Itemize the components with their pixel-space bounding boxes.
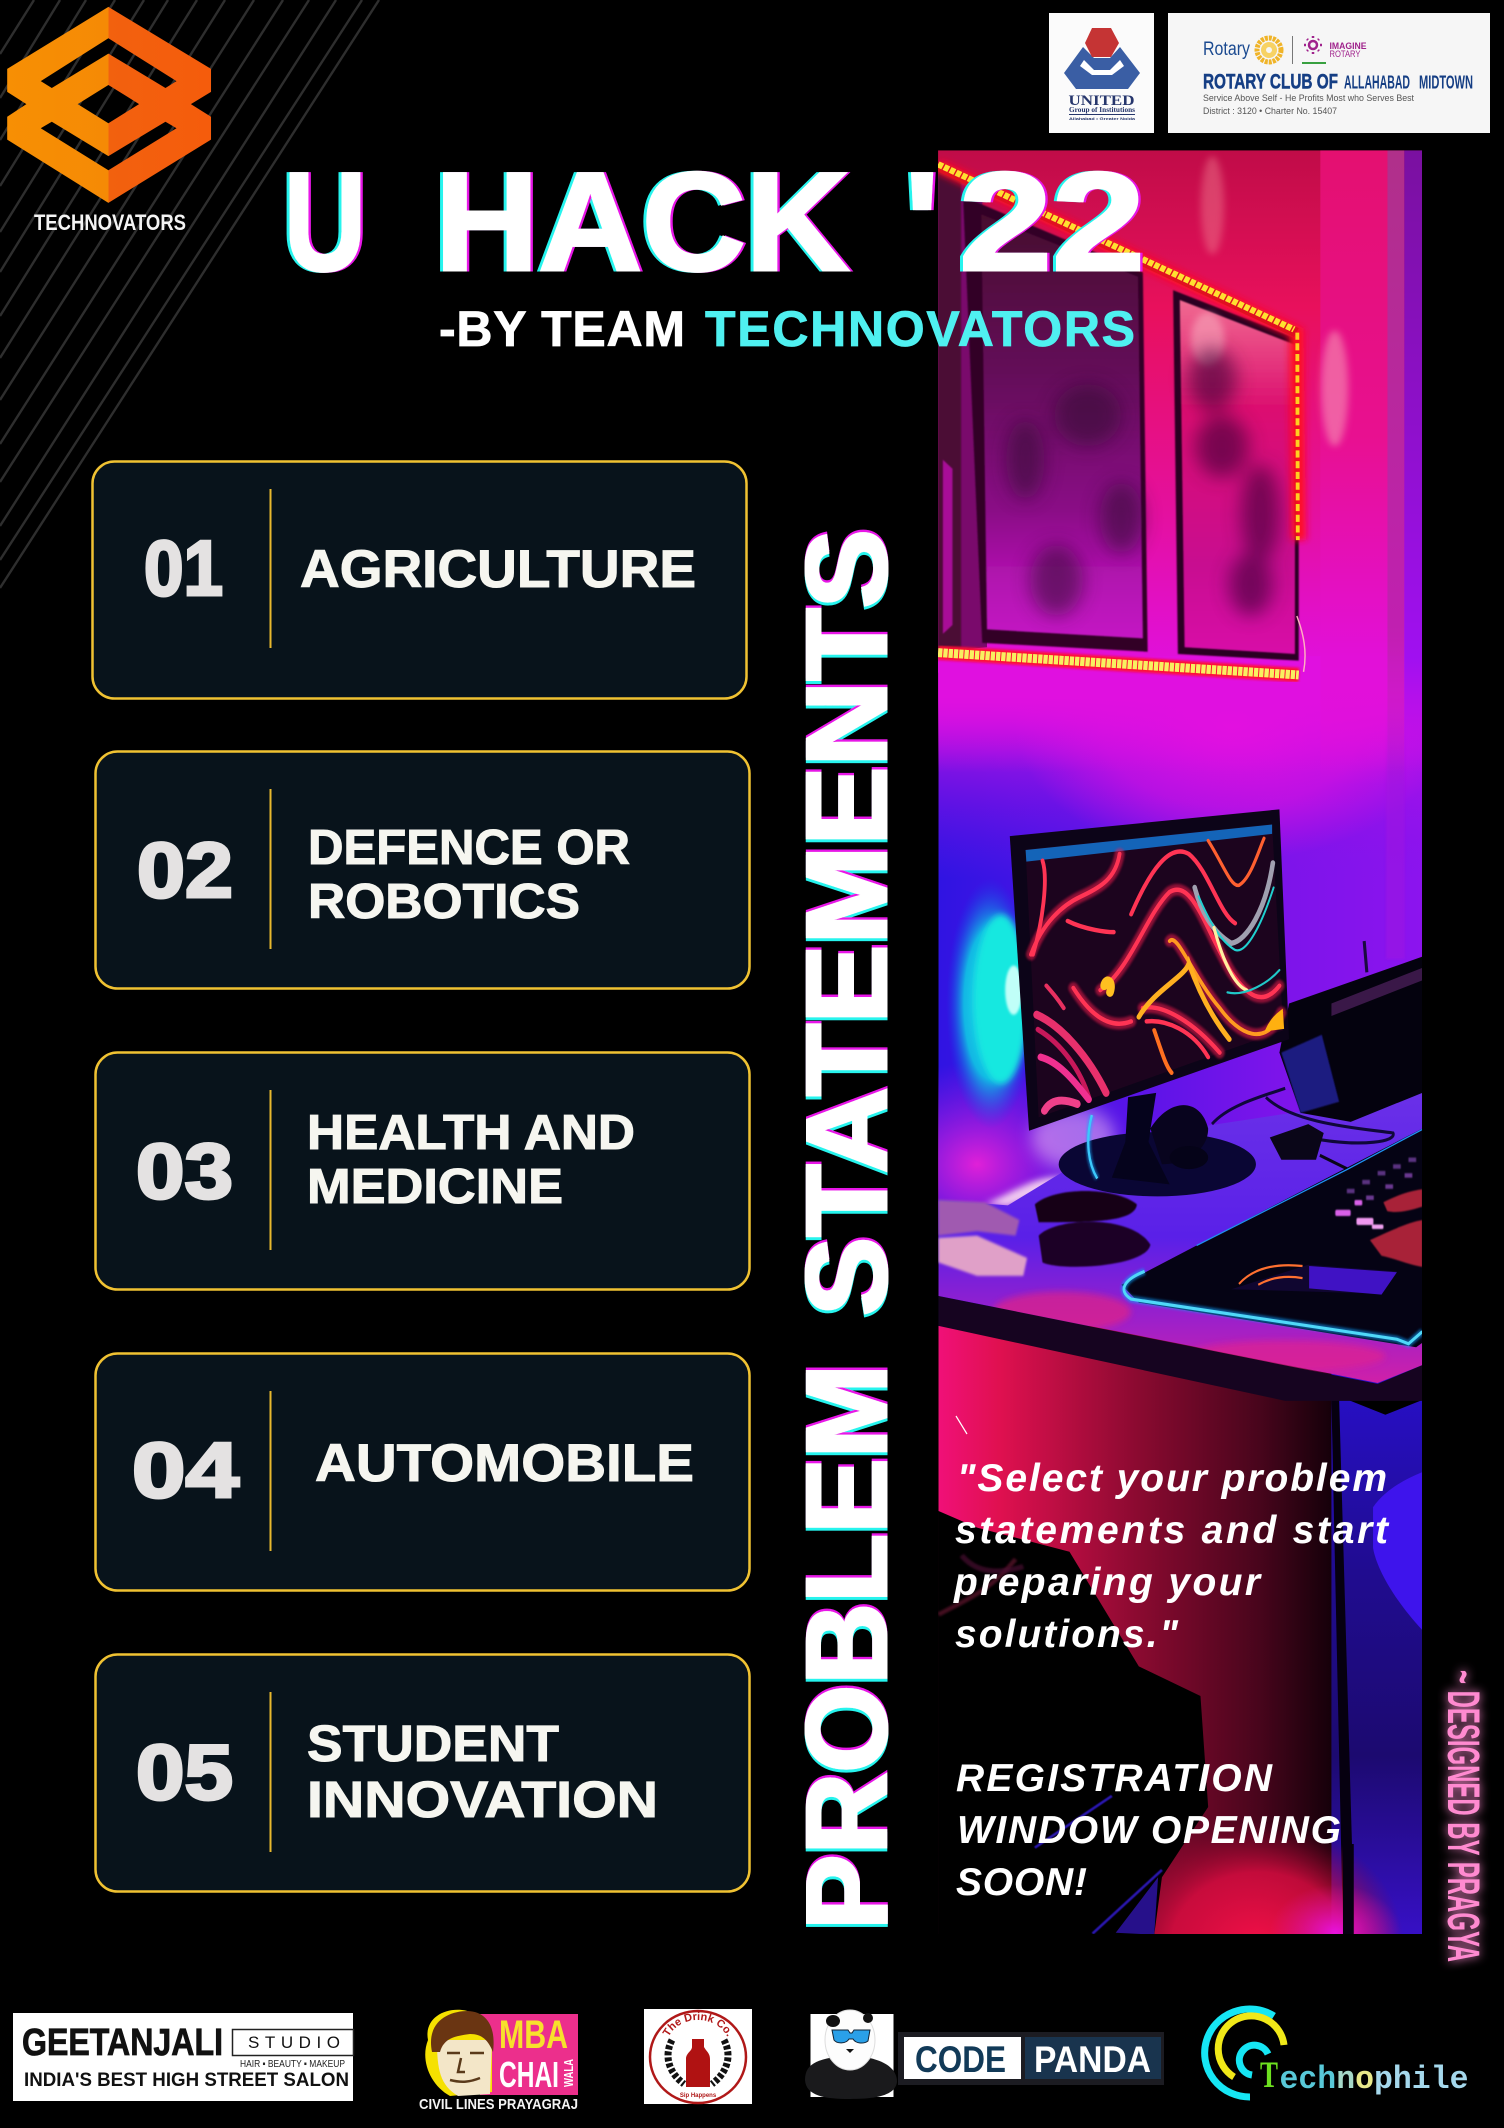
subtitle: TECHNOVATORS	[705, 301, 1135, 357]
panel: 01 agriculture: 01	[144, 524, 223, 612]
icon: rotary wheel	[1257, 38, 1281, 62]
sponsor logo: Rotary Club of Allahabad Midtown: ROTARY CLUB OF	[1203, 70, 1338, 94]
title: HACK	[435, 143, 849, 300]
diagonal line pattern	[0, 0, 379, 588]
panel: 05 student innovation: 05	[136, 1728, 233, 1816]
vertical heading: problem statements: STATEMENTS	[784, 529, 911, 1316]
sponsor logo: Rotary Club of Allahabad Midtown: IMAGINE	[1330, 41, 1366, 51]
sponsor logo: MBA Chai Wala: MBA	[499, 2013, 568, 2057]
keyboard	[1335, 1158, 1416, 1229]
mat glow edge	[1124, 1129, 1422, 1344]
icon: panda	[805, 2010, 897, 2099]
sponsor logo: MBA Chai Wala	[419, 2010, 578, 2113]
panel: 02 defence or robotics: 02	[137, 826, 233, 914]
stand base	[1059, 1132, 1256, 1196]
panel: 03 health and medicine	[96, 1052, 750, 1290]
monitor title bar	[1026, 825, 1272, 862]
text block: quote: statements and start	[955, 1509, 1390, 1552]
subtitle	[439, 301, 1135, 357]
panel: 03 health and medicine: HEALTH AND	[307, 1106, 635, 1160]
text block: registration notice: WINDOW OPENING	[957, 1809, 1341, 1852]
panel: 05 student innovation: INNOVATION	[307, 1771, 658, 1828]
sponsor logo: MBA Chai Wala: CHAI	[499, 2054, 559, 2095]
sponsor logo: The Drink Co: The Drink Co.	[662, 2012, 730, 2036]
sponsor logo: Technophile: T	[1260, 2055, 1278, 2096]
text block: registration notice: REGISTRATION	[956, 1757, 1273, 1800]
panel: 02 defence or robotics	[96, 752, 750, 988]
panel: 04 automobile: AUTOMOBILE	[315, 1434, 694, 1493]
monitor screen	[1026, 824, 1283, 1117]
desk front edge	[939, 1296, 1422, 1401]
sponsor logo: Geetanjali Studio: INDIA'S BEST HIGH STREET SALON	[24, 2070, 349, 2091]
panel: 05 student innovation: STUDENT	[307, 1715, 559, 1772]
sponsor logo: Rotary Club of Allahabad Midtown: ALLAHABAD	[1344, 72, 1410, 92]
vertical heading: problem statements: PROBLEM	[784, 1364, 911, 1930]
laptop behind monitor	[1279, 957, 1422, 1122]
sponsor logo: Technophile: echnophile	[1280, 2061, 1468, 2098]
sponsor logo: Rotary Club of Allahabad Midtown	[1168, 13, 1490, 133]
sponsor logo: Rotary Club of Allahabad Midtown: Service Above Self - He Profits Most who Serves Best	[1203, 93, 1414, 103]
panel: 01 agriculture: AGRICULTURE	[300, 540, 696, 599]
desk, monitor and peripherals	[939, 809, 1422, 1401]
screen wallpaper swirls	[1031, 838, 1283, 1111]
text block: registration notice	[956, 1757, 1341, 1904]
lower wall and silhouettes	[938, 1326, 1422, 1934]
title: U	[284, 143, 366, 300]
sponsor logo: Rotary Club of Allahabad Midtown: ROTARY	[1330, 49, 1360, 59]
small slash mark	[956, 1416, 967, 1434]
text block: quote: preparing your	[953, 1561, 1262, 1604]
sponsor logo: Geetanjali Studio: GEETANJALI	[22, 2022, 223, 2064]
panel: 03 health and medicine: 03	[136, 1127, 233, 1215]
sponsor logo: The Drink Co	[644, 2009, 752, 2104]
photo: neon gaming desk	[938, 150, 1422, 1934]
text block: quote: "Select your problem	[957, 1457, 1387, 1500]
cables and hub	[1212, 1088, 1393, 1143]
panel: 04 automobile: 04	[132, 1426, 239, 1514]
sponsor logo: MBA Chai Wala: WALA	[561, 2059, 576, 2087]
title	[284, 143, 1145, 300]
tablet on mat	[1231, 1265, 1397, 1294]
icon: face	[425, 2010, 494, 2096]
panel: 02 defence or robotics: DEFENCE OR	[308, 821, 630, 875]
hand on keyboard	[1370, 1189, 1422, 1267]
panel: 01 agriculture	[92, 462, 746, 698]
sponsor logo: Geetanjali Studio	[13, 2013, 354, 2101]
panel: 05 student innovation	[96, 1654, 750, 1892]
sponsor logo: Code Panda: CODE	[915, 2039, 1006, 2080]
text block: quote	[953, 1457, 1390, 1656]
controllers	[939, 1200, 1027, 1276]
icon: imagine rotary	[1302, 36, 1326, 64]
sponsor logo: United Group of Institutions	[1049, 13, 1154, 133]
text block: quote: solutions."	[955, 1613, 1178, 1656]
vertical heading: problem statements	[784, 529, 911, 1930]
text block: registration notice: SOON!	[956, 1861, 1087, 1904]
title: '	[905, 143, 939, 300]
subtitle: -BY TEAM	[439, 301, 685, 357]
monitor body	[1010, 809, 1289, 1131]
logo name: TECHNOVATORS	[34, 210, 186, 235]
sponsor logo: Technophile	[1205, 2009, 1468, 2098]
sponsor logo: Rotary Club of Allahabad Midtown: District : 3120 • Charter No. 15407	[1203, 106, 1337, 116]
sponsor logo: MBA Chai Wala: CIVIL LINES PRAYAGRAJ	[419, 2096, 578, 2113]
desk mat	[1121, 1129, 1422, 1347]
sponsor logo: Geetanjali Studio: HAIR ▪ BEAUTY ▪ MAKEUP	[240, 2059, 345, 2070]
sponsor logo: Geetanjali Studio: STUDIO	[248, 2033, 340, 2052]
panel: 03 health and medicine: MEDICINE	[307, 1160, 563, 1214]
panel: 02 defence or robotics: ROBOTICS	[308, 875, 580, 929]
sponsor logo: Code Panda: PANDA	[1034, 2039, 1151, 2080]
upper wall with frames and LED strip	[938, 150, 1422, 784]
middle wall	[854, 593, 1447, 1334]
logo mark	[7, 7, 211, 203]
sponsor logo: Code Panda	[805, 2010, 1164, 2099]
panel: 04 automobile	[96, 1354, 750, 1590]
sponsor logo: United Group of Institutions: Group of Institutions	[1069, 106, 1135, 114]
sponsor logo: United Group of Institutions: Allahabad • Greater Noida	[1069, 116, 1136, 121]
sponsor logo: United Group of Institutions: UNITED	[1068, 93, 1135, 109]
sponsor logo: Rotary Club of Allahabad Midtown: Rotary	[1203, 39, 1250, 60]
LED streak behind stand	[1088, 1115, 1097, 1179]
title: 22	[959, 143, 1145, 300]
sponsor logo: The Drink Co: Sip Happens	[680, 2093, 717, 2099]
desk surface	[939, 1093, 1422, 1383]
logo: Technovators	[7, 7, 211, 235]
